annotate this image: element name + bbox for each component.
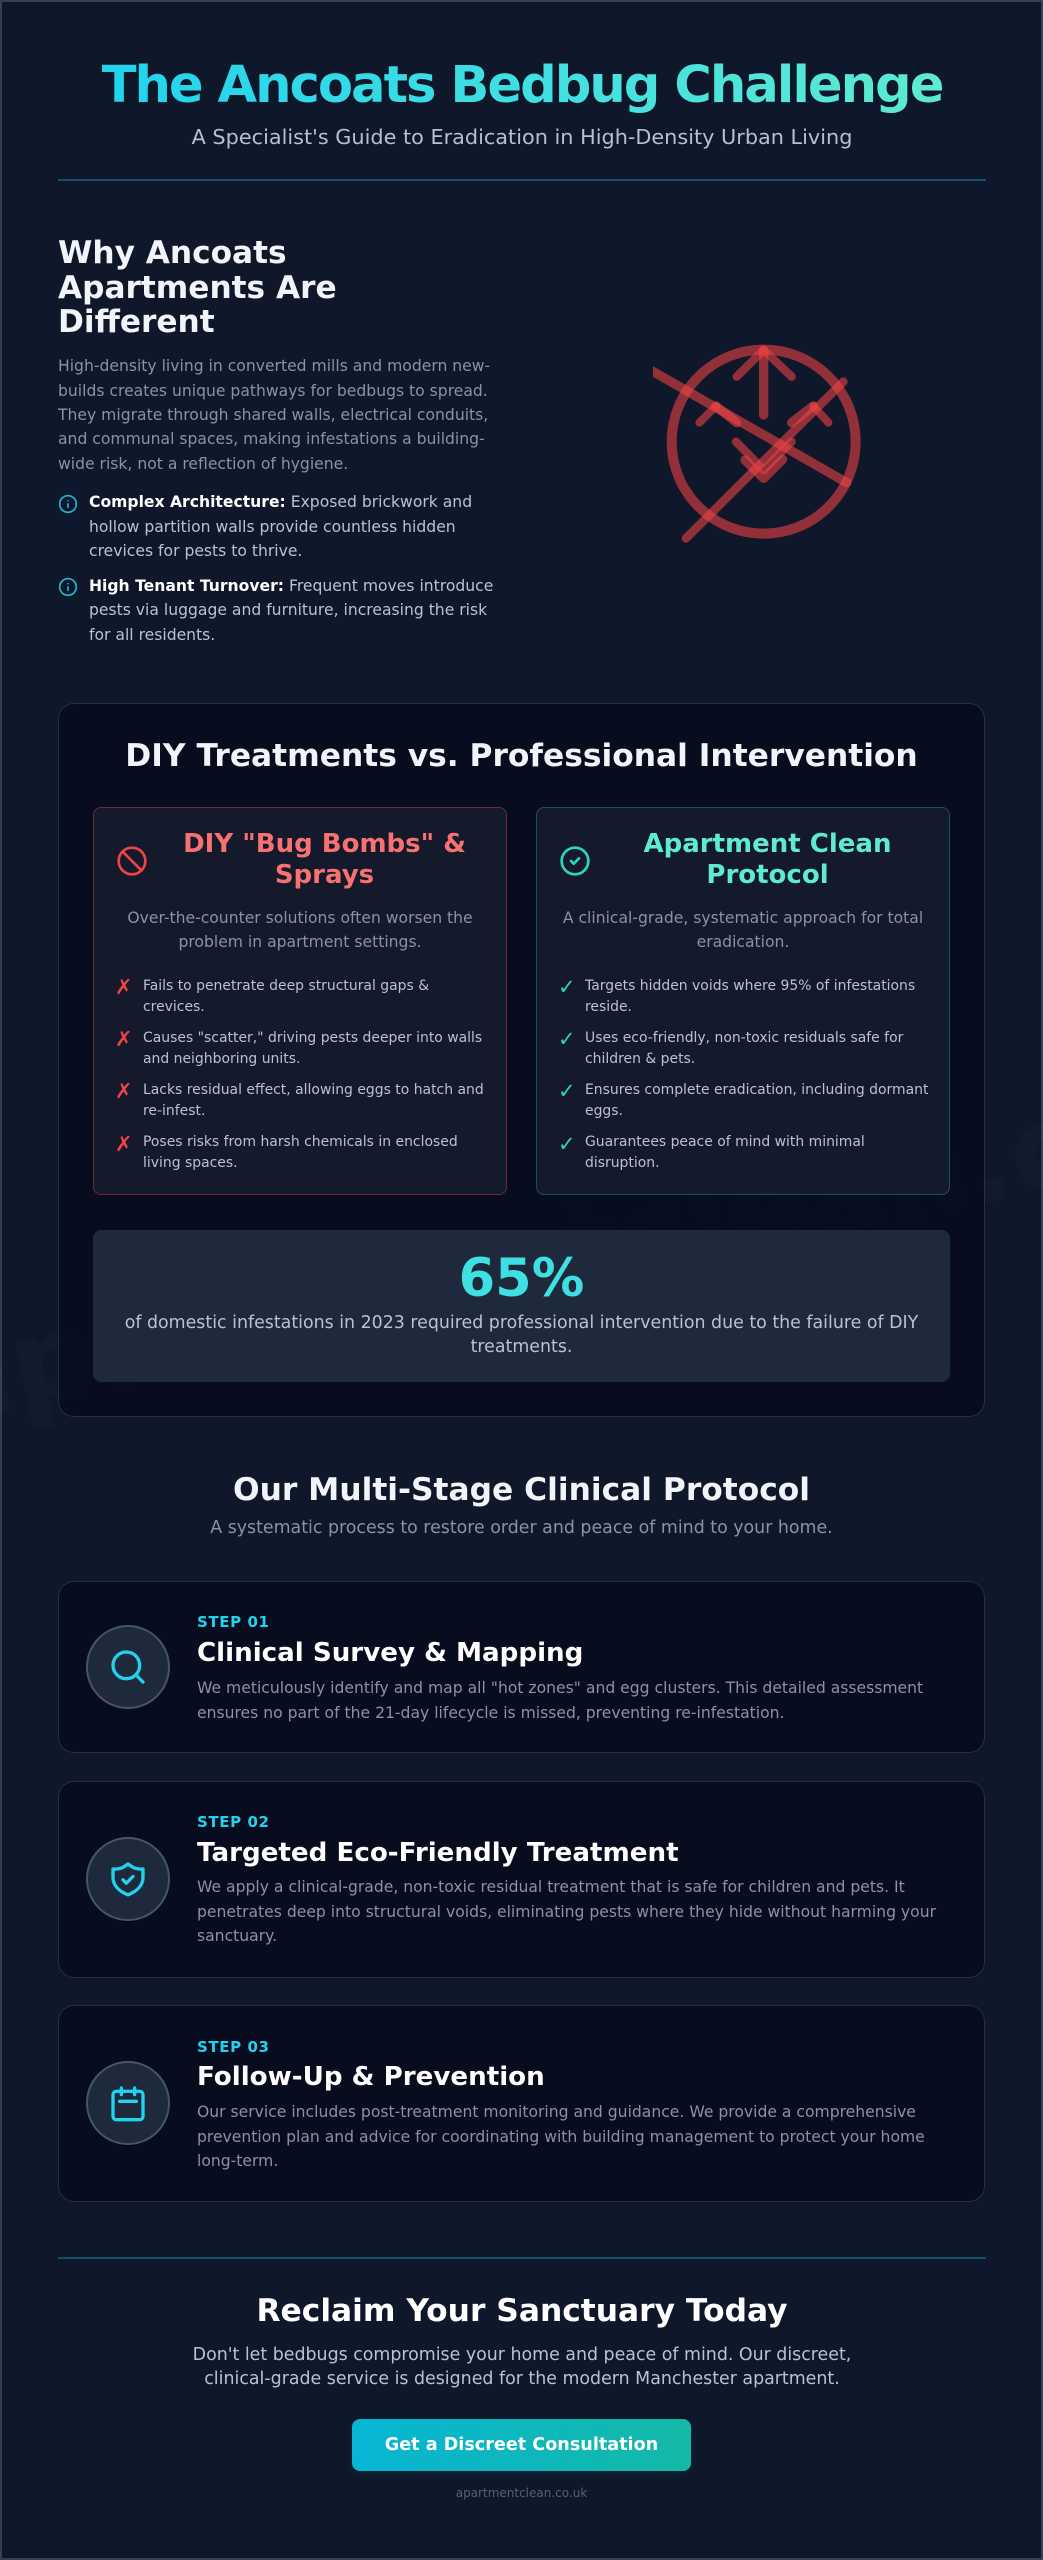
- section: why Ancoats heading: Apartments Are: [58, 270, 337, 306]
- illustration: crossed-out bedbug icon: [653, 344, 861, 543]
- cross marks: [115, 975, 133, 1156]
- step 02 text: sanctuary.: [197, 1927, 277, 1945]
- DIY failure list: Lacks residual effect, allowing eggs to hatch and: [143, 1082, 484, 1098]
- protocol benefit list: children & pets.: [585, 1051, 695, 1067]
- CTA text: Don't let bedbugs compromise your home and peace of mind. Our discreet,: [193, 2345, 851, 2365]
- section: why Ancoats heading: Different: [58, 304, 215, 340]
- panel: DIY vs professional: [58, 703, 985, 1417]
- DIY card title: [183, 829, 466, 890]
- step 02 label: STEP 02: [197, 1813, 270, 1831]
- step 03 label: STEP 03: [197, 2038, 270, 2056]
- protocol section heading: Our Multi-Stage Clinical Protocol: [233, 1472, 810, 1508]
- icon: shield check: [86, 1837, 170, 1921]
- list item: high tenant turnover: pests via luggage and furniture, increasing the risk: [89, 601, 487, 619]
- DIY failure list: and neighboring units.: [143, 1051, 300, 1067]
- icon: prohibited: [117, 846, 147, 876]
- step 02 text: We apply a clinical-grade, non-toxic residual treatment that is safe for children and pets. It: [197, 1878, 905, 1896]
- list item: complex architecture: [89, 493, 472, 560]
- protocol benefit list: disruption.: [585, 1155, 660, 1171]
- check marks: ✓: [558, 1079, 576, 1103]
- DIY failure list: [143, 978, 484, 1171]
- DIY card description: [127, 909, 473, 951]
- step 03 text: prevention plan and advice for coordinating with building management to protect your home: [197, 2128, 925, 2146]
- stat caption: of domestic infestations in 2023 required professional intervention due to the failure of DIY: [125, 1313, 918, 1333]
- title: The Ancoats Bedbug Challenge: [102, 54, 942, 114]
- list item: high tenant turnover: for all residents.: [89, 626, 215, 644]
- protocol benefit list: eggs.: [585, 1103, 623, 1119]
- stat box: 65%: [93, 1230, 950, 1382]
- DIY card description: Over-the-counter solutions often worsen the: [127, 909, 473, 927]
- icon: info 2: [58, 578, 78, 596]
- protocol benefit list: Guarantees peace of mind with minimal: [585, 1134, 865, 1150]
- step 01 label: STEP 01: [197, 1613, 270, 1631]
- site URL: apartmentclean.co.uk: [456, 2486, 587, 2500]
- step 02 card: [58, 1781, 985, 1978]
- cross marks: ✗: [115, 1132, 133, 1156]
- check marks: [558, 975, 576, 1156]
- list item: complex architecture: hollow partition walls provide countless hidden: [89, 518, 456, 536]
- protocol benefit list: Targets hidden voids where 95% of infestations: [585, 978, 915, 994]
- stat caption: treatments.: [471, 1337, 572, 1357]
- protocol card description: eradication.: [697, 933, 789, 951]
- step 03 text: long-term.: [197, 2152, 278, 2170]
- protocol benefit list: reside.: [585, 999, 632, 1015]
- list item: complex architecture: Complex Architecture: Exposed brickwork and: [89, 493, 472, 511]
- step 02 text: [197, 1878, 936, 1945]
- check marks: ✓: [558, 1132, 576, 1156]
- list item: complex architecture: crevices for pests to thrive.: [89, 542, 302, 560]
- DIY card title: Sprays: [275, 860, 374, 890]
- step 01 card: [58, 1581, 985, 1753]
- panel heading: DIY Treatments vs. Professional Intervention: [125, 738, 918, 774]
- protocol card description: [563, 909, 923, 951]
- protocol card title: Apartment Clean: [644, 829, 891, 859]
- DIY failure list: Poses risks from harsh chemicals in enclosed: [143, 1134, 458, 1150]
- section intro paragraph: builds creates unique pathways for bedbugs to spread.: [58, 382, 488, 400]
- check marks: ✓: [558, 1027, 576, 1051]
- step 01 title: Clinical Survey & Mapping: [197, 1638, 583, 1668]
- protocol benefit list: Uses eco-friendly, non-toxic residuals safe for: [585, 1030, 903, 1046]
- section intro paragraph: and communal spaces, making infestations a building-: [58, 430, 485, 448]
- CTA text: [193, 2345, 851, 2389]
- section: why Ancoats heading: Why Ancoats: [58, 235, 287, 271]
- protocol card title: [644, 829, 891, 890]
- section intro paragraph: [58, 357, 490, 473]
- protocol card description: A clinical-grade, systematic approach for total: [563, 909, 923, 927]
- section intro paragraph: wide risk, not a reflection of hygiene.: [58, 455, 348, 473]
- DIY card title: DIY "Bug Bombs" &: [183, 829, 466, 859]
- DIY failure list: crevices.: [143, 999, 205, 1015]
- stat caption: [125, 1313, 918, 1357]
- DIY failure list: Fails to penetrate deep structural gaps &: [143, 978, 429, 994]
- cross marks: ✗: [115, 975, 133, 999]
- step 01 text: ensures no part of the 21-day lifecycle is missed, preventing re-infestation.: [197, 1704, 784, 1722]
- CTA text: clinical-grade service is designed for the modern Manchester apartment.: [204, 2369, 840, 2389]
- DIY failure list: re-infest.: [143, 1103, 205, 1119]
- header: [58, 54, 986, 181]
- CTA button: Get a Discreet Consultation: [385, 2435, 658, 2455]
- step 01 text: [197, 1679, 923, 1722]
- section intro paragraph: High-density living in converted mills and modern new-: [58, 357, 490, 375]
- step 03 title: Follow-Up & Prevention: [197, 2062, 545, 2092]
- CTA button: [352, 2419, 691, 2471]
- step 02 text: penetrates deep into structural voids, eliminating pests where they hide without harming your: [197, 1903, 936, 1921]
- step 03 text: Our service includes post-treatment monitoring and guidance. We provide a comprehensive: [197, 2103, 916, 2121]
- DIY failure list: Causes "scatter," driving pests deeper into walls: [143, 1030, 482, 1046]
- protocol benefit list: [584, 978, 928, 1171]
- card: DIY bug bombs: [93, 807, 507, 1195]
- step 03 text: [197, 2103, 925, 2170]
- section intro paragraph: They migrate through shared walls, electrical conduits,: [58, 406, 488, 424]
- DIY failure list: living spaces.: [143, 1155, 238, 1171]
- cross marks: ✗: [115, 1027, 133, 1051]
- step 02 title: Targeted Eco-Friendly Treatment: [197, 1838, 679, 1868]
- icon: calendar: [86, 2061, 170, 2145]
- protocol benefit list: Ensures complete eradication, including dormant: [585, 1082, 928, 1098]
- icon: magnifier: [86, 1625, 170, 1709]
- icon: check circle: [560, 846, 590, 876]
- card: apartment clean protocol: [536, 807, 950, 1195]
- stat number: 65%: [459, 1248, 584, 1309]
- subtitle: A Specialist's Guide to Eradication in High-Density Urban Living: [192, 125, 852, 149]
- step 01 text: We meticulously identify and map all "hot zones" and egg clusters. This detailed assessment: [197, 1679, 923, 1697]
- footer call to action: [58, 2257, 986, 2500]
- cross marks: ✗: [115, 1079, 133, 1103]
- list item: high tenant turnover: High Tenant Turnover: Frequent moves introduce: [89, 577, 493, 595]
- section: why Ancoats heading: [58, 235, 337, 340]
- list item: high tenant turnover: [89, 577, 493, 644]
- check marks: ✓: [558, 975, 576, 999]
- DIY card description: problem in apartment settings.: [178, 933, 422, 951]
- protocol section subheading: A systematic process to restore order and peace of mind to your home.: [210, 1518, 833, 1538]
- step 03 card: [58, 2005, 985, 2202]
- icon: info 1: [58, 494, 78, 514]
- protocol card title: Protocol: [706, 860, 829, 890]
- CTA heading: Reclaim Your Sanctuary Today: [256, 2293, 788, 2329]
